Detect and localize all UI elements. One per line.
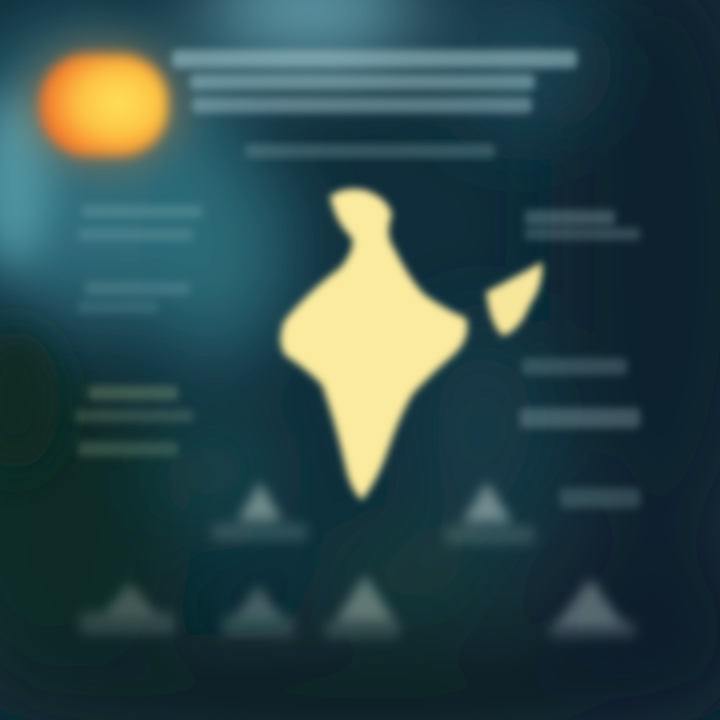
icons: mountain triangles with labels — [80, 482, 635, 638]
map of India — [280, 189, 542, 500]
icon: sun — [40, 54, 168, 156]
right text blocks — [520, 210, 640, 508]
left text blocks — [75, 205, 202, 456]
title — [172, 50, 577, 113]
subtitle — [245, 144, 495, 158]
sun glow — [24, 40, 184, 170]
